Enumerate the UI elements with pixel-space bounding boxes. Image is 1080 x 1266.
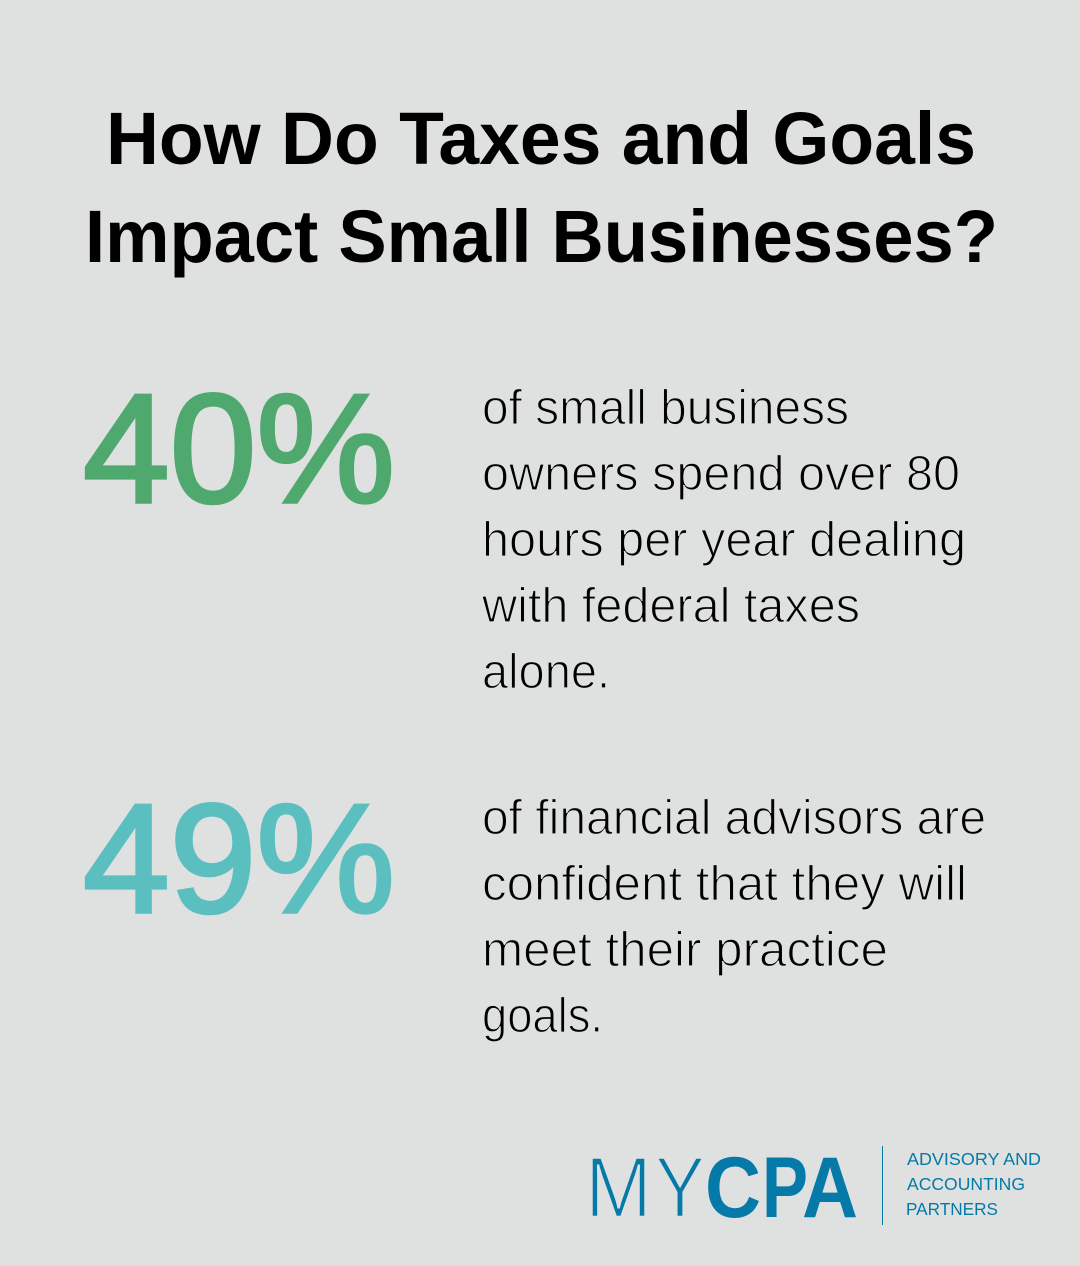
stat description: federal taxes: with federal taxes xyxy=(481,579,860,633)
logo wordmark: C xyxy=(705,1140,761,1236)
logo wordmark: Y xyxy=(655,1140,705,1236)
stat description: federal taxes: owners spend over 80 xyxy=(482,447,960,501)
stat: 40% of small business owners xyxy=(83,362,966,699)
stat description: federal taxes: hours per year dealing xyxy=(482,513,966,567)
stat description: practice goals: goals. xyxy=(482,989,603,1043)
title xyxy=(85,97,998,278)
title: Impact Small Businesses? xyxy=(85,195,998,278)
logo tagline: PARTNERS xyxy=(906,1199,998,1219)
stat description: practice goals: meet their practice xyxy=(482,923,888,977)
logo wordmark: A xyxy=(802,1140,858,1236)
stat: 49% of financial advisors xyxy=(83,772,986,1043)
logo tagline: ADVISORY AND xyxy=(907,1149,1041,1169)
logo: MYCPA Advisory and Accounting Partners xyxy=(585,1140,1041,1236)
logo tagline xyxy=(906,1149,1041,1219)
logo wordmark: P xyxy=(762,1140,808,1236)
stat value: 49%: 49% xyxy=(83,772,395,945)
stat description: federal taxes xyxy=(481,381,966,699)
logo wordmark xyxy=(585,1140,858,1236)
stat description: federal taxes: of small business xyxy=(482,381,849,435)
stat description: practice goals: confident that they will xyxy=(482,857,967,911)
title: How Do Taxes and Goals xyxy=(106,97,976,180)
stat description: federal taxes: alone. xyxy=(482,645,610,699)
stat description: practice goals xyxy=(482,791,986,1043)
logo wordmark: M xyxy=(585,1140,652,1236)
stat value: 40%: 40% xyxy=(83,362,395,535)
logo tagline: ACCOUNTING xyxy=(907,1174,1025,1194)
stat description: practice goals: of financial advisors are xyxy=(482,791,986,845)
